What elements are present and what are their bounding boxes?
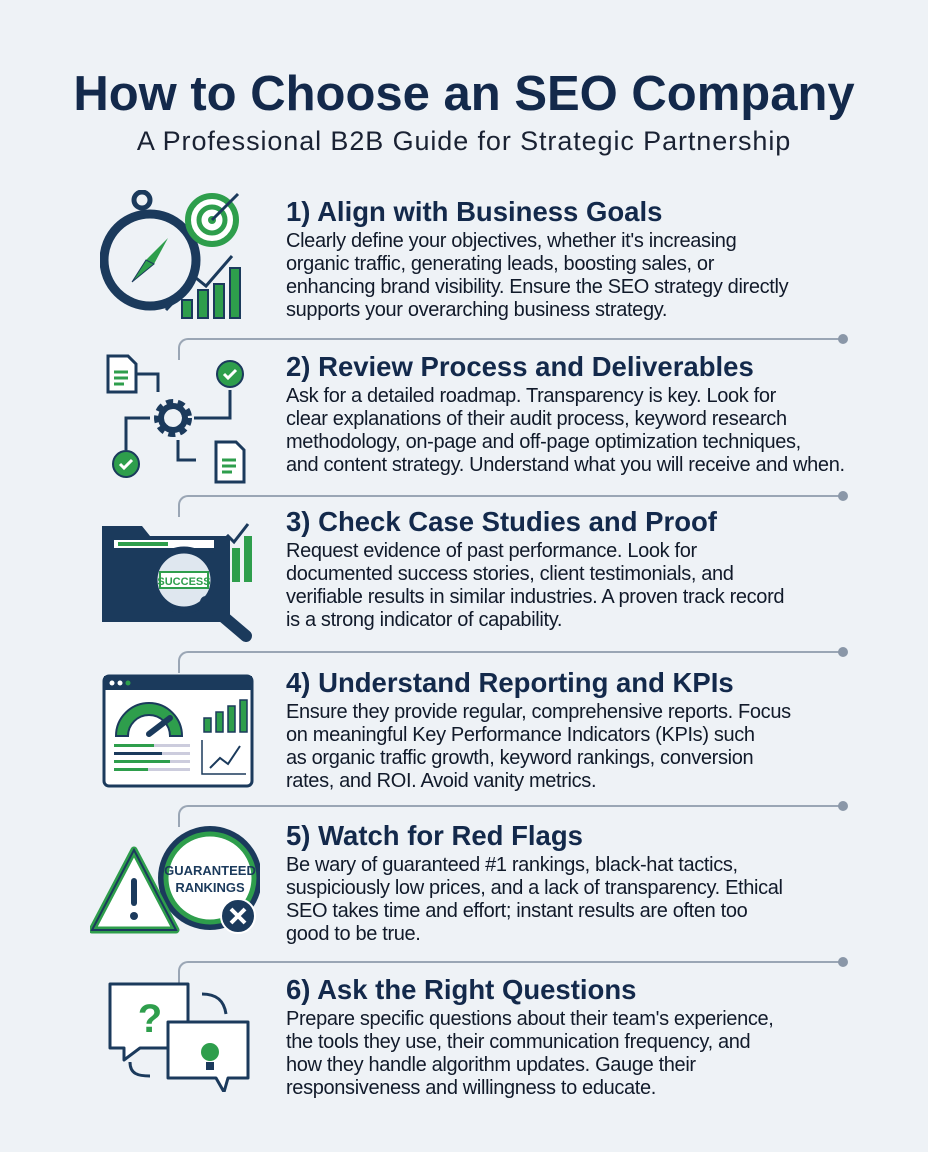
icon: folder magnifier success	[102, 523, 252, 642]
section 1 text: organic traffic, generating leads, boosting sales, or	[286, 253, 714, 275]
section 3 text: is a strong indicator of capability.	[286, 609, 562, 631]
section 3 text	[286, 506, 784, 631]
icon: compass target chart	[100, 190, 241, 319]
section 3 text: documented success stories, client testimonials, and	[286, 563, 734, 585]
section 4 text: on meaningful Key Performance Indicators (KPIs) such	[286, 724, 755, 746]
section 4 text: as organic traffic growth, keyword rankings, conversion	[286, 747, 753, 769]
section 5 text	[286, 820, 783, 945]
icon: warning badge: GUARANTEED	[164, 863, 256, 878]
icon: warning badge	[90, 826, 260, 934]
section 4 text: rates, and ROI. Avoid vanity metrics.	[286, 770, 596, 792]
section 2 text: methodology, on-page and off-page optimization techniques,	[286, 431, 801, 453]
icon: chat bubbles question	[108, 982, 250, 1092]
section 6 text: 6) Ask the Right Questions	[286, 974, 636, 1005]
section 1 text: Clearly define your objectives, whether it's increasing	[286, 230, 736, 252]
section 4 text	[286, 667, 791, 792]
section 1 text	[286, 196, 788, 321]
section 5 text: Be wary of guaranteed #1 rankings, black-hat tactics,	[286, 854, 738, 876]
section 5 text: SEO takes time and effort; instant results are often too	[286, 900, 747, 922]
section 1 text: enhancing brand visibility. Ensure the SEO strategy directly	[286, 276, 788, 298]
section 4 text: 4) Understand Reporting and KPIs	[286, 667, 734, 698]
icon: dashboard	[102, 674, 254, 788]
section 1 text: supports your overarching business strategy.	[286, 299, 667, 321]
section 6 text: Prepare specific questions about their team's experience,	[286, 1008, 773, 1030]
section 3 text: verifiable results in similar industries. A proven track record	[286, 586, 784, 608]
section 3 text: 3) Check Case Studies and Proof	[286, 506, 717, 537]
section 2 text: and content strategy. Understand what you will receive and when.	[286, 454, 845, 476]
section 6 text: the tools they use, their communication frequency, and	[286, 1031, 750, 1053]
section 6 text: responsiveness and willingness to educate.	[286, 1077, 656, 1099]
section 2 text: 2) Review Process and Deliverables	[286, 351, 754, 382]
icon: folder magnifier success: SUCCESS	[157, 576, 211, 588]
section 2 text: clear explanations of their audit process, keyword research	[286, 408, 787, 430]
section 1 text: 1) Align with Business Goals	[286, 196, 662, 227]
section 5 text: suspiciously low prices, and a lack of transparency. Ethical	[286, 877, 783, 899]
section 3 text: Request evidence of past performance. Look for	[286, 540, 697, 562]
section 6 text: how they handle algorithm updates. Gauge their	[286, 1054, 696, 1076]
section 2 text	[286, 351, 845, 476]
section 4 text: Ensure they provide regular, comprehensive reports. Focus	[286, 701, 791, 723]
subtitle: A Professional B2B Guide for Strategic Partnership	[137, 126, 791, 156]
section 2 text: Ask for a detailed roadmap. Transparency is key. Look for	[286, 385, 776, 407]
icon: warning badge: RANKINGS	[175, 880, 245, 895]
title: How to Choose an SEO Company	[73, 67, 855, 121]
section 6 text	[286, 974, 773, 1099]
section 5 text: good to be true.	[286, 923, 421, 945]
icon: process gear	[106, 354, 246, 484]
icon: chat bubbles question: ?	[138, 997, 162, 1041]
section 5 text: 5) Watch for Red Flags	[286, 820, 583, 851]
